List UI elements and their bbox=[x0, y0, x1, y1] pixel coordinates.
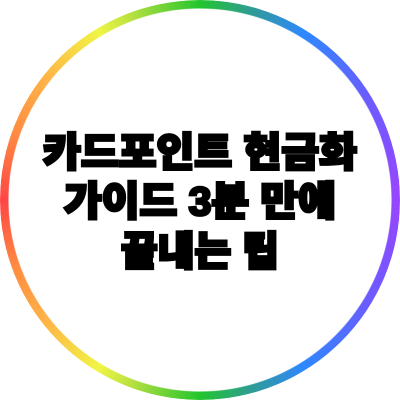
title line 2: 가이드 3분 만에 bbox=[64, 180, 336, 224]
title line 3: 끝내는 팁 bbox=[121, 230, 279, 274]
title line 1: 카드포인트 현금화 bbox=[43, 131, 357, 175]
